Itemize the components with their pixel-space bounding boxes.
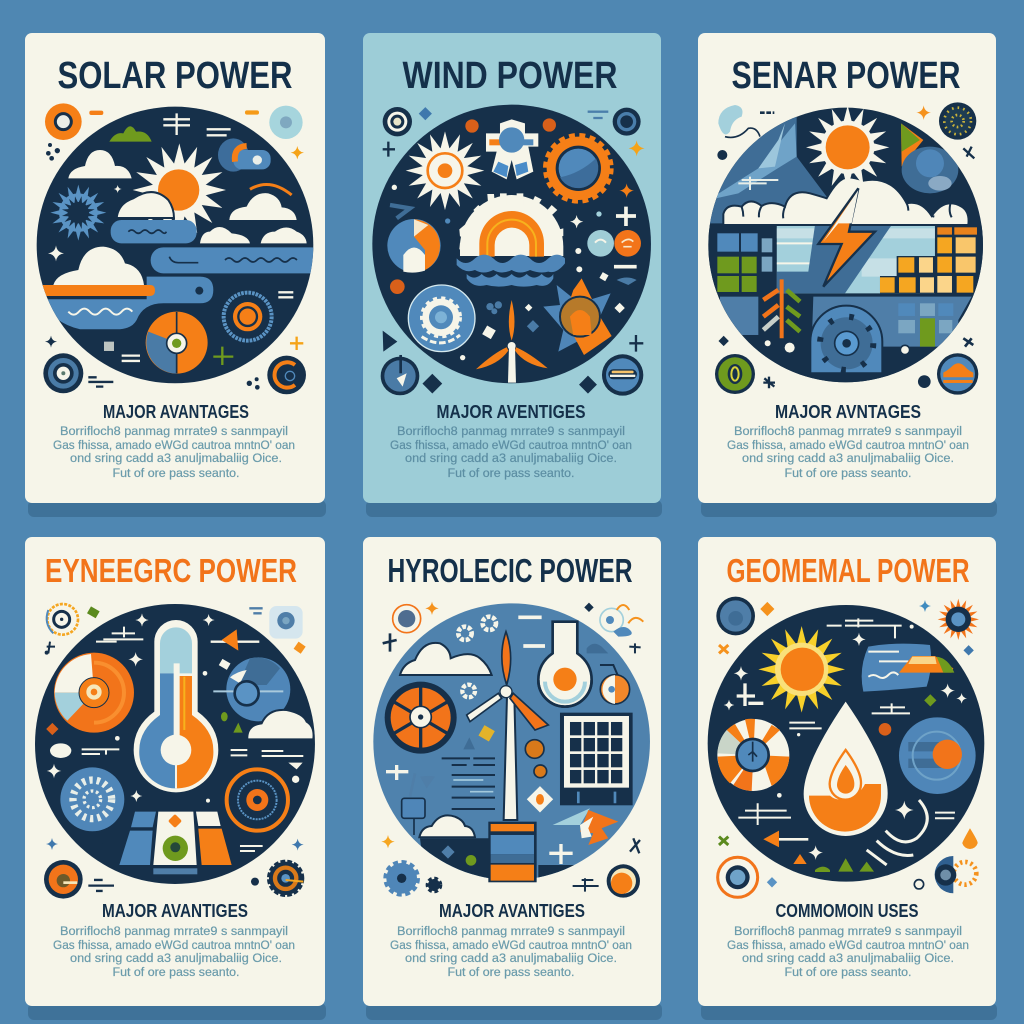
wind turbine <box>467 632 548 820</box>
subheading: MAJOR AVENTIGES <box>436 401 586 422</box>
illustration clipped <box>705 110 995 390</box>
sunburst icon <box>937 598 979 640</box>
orange wheel <box>385 682 457 754</box>
sun <box>805 105 890 190</box>
subheading: MAJOR AVANTAGES <box>103 401 249 422</box>
icon: pale gear box <box>269 606 303 639</box>
orange coins <box>478 725 553 813</box>
body text: ond sring cadd a3 anuljmabaliig Oice. <box>742 453 954 465</box>
bottom base <box>717 294 974 382</box>
target pie <box>54 653 134 733</box>
card background <box>363 537 661 1006</box>
body text <box>727 426 969 480</box>
wheel <box>717 719 789 791</box>
body text: Borrifloch8 panmag mrrate9 s sanmpayil <box>397 926 625 938</box>
body text: Borrifloch8 panmag mrrate9 s sanmpayil <box>734 426 962 438</box>
big cloud <box>53 247 144 285</box>
title: HYROLECIC POWER <box>388 552 633 589</box>
cream bits <box>50 659 303 769</box>
icon: orange ring <box>393 605 421 633</box>
cloud over sun <box>117 192 174 218</box>
arrow triangle <box>383 331 397 352</box>
icon: lines <box>122 113 293 361</box>
lines <box>88 880 114 891</box>
title: SENAR POWER <box>732 55 960 97</box>
plug icon <box>402 773 435 835</box>
circle background <box>373 603 650 880</box>
lines and dark disc <box>588 108 641 136</box>
icon: green ring <box>715 354 755 394</box>
water band <box>151 247 324 273</box>
blue gear disc <box>408 285 475 352</box>
icon: pale disc <box>269 106 303 139</box>
pie chart <box>387 219 441 273</box>
wind turbine <box>476 300 548 383</box>
flower <box>543 278 612 355</box>
body text: ond sring cadd a3 anuljmabaliig Oice. <box>742 953 954 965</box>
big cream gear <box>459 193 563 257</box>
circle background <box>372 105 651 383</box>
arrow dart <box>211 629 259 651</box>
blue marks <box>486 277 637 332</box>
waves <box>457 255 565 287</box>
title: WIND POWER <box>402 55 618 97</box>
title: SOLAR POWER <box>58 55 292 97</box>
leaf tower <box>763 279 800 338</box>
lightning bolt <box>818 188 875 287</box>
card shadows <box>28 500 997 1020</box>
body text: Gas fhissa, amado eWGd cautroa mntnO' oan <box>390 440 632 452</box>
waves <box>68 287 203 315</box>
orange mark <box>46 723 58 735</box>
illustration: storm and grid scene <box>705 102 995 395</box>
subheading: MAJOR AVNTAGES <box>775 401 921 422</box>
panel: senar power <box>698 33 996 503</box>
card background <box>698 537 996 1006</box>
icon: orange disc <box>607 864 640 898</box>
icon: flame ring <box>44 860 83 899</box>
orange shore <box>40 285 155 296</box>
icon: orange ring <box>45 103 82 140</box>
blue pattern disc <box>60 767 124 831</box>
bottom blue panels <box>720 297 972 347</box>
icon: dark gear <box>428 879 440 891</box>
circle background <box>708 605 984 882</box>
diamonds <box>422 374 597 394</box>
body text: Borrifloch8 panmag mrrate9 s sanmpayil <box>734 926 962 938</box>
flask <box>538 622 592 707</box>
icon: orange C ring <box>267 356 306 394</box>
small tokens <box>765 340 910 355</box>
small diamonds <box>460 215 625 360</box>
icon: blue gear <box>50 184 107 241</box>
body text: Fut of ore pass seanto. <box>112 967 240 979</box>
orange gear with disc <box>547 137 610 200</box>
cloud inner arcs <box>740 204 952 218</box>
body text: Fut of ore pass seanto. <box>784 967 912 979</box>
seascape card <box>862 644 954 692</box>
thermometer <box>134 620 218 792</box>
dark ground <box>420 838 574 878</box>
small marks <box>45 110 304 348</box>
cloud <box>68 150 132 178</box>
body text <box>390 426 632 480</box>
icon: dotted disc <box>939 102 976 140</box>
icon: sunset disc <box>937 353 978 395</box>
circle background <box>37 107 313 383</box>
panel: hyrolecic power <box>363 537 661 1006</box>
body text: Fut of ore pass seanto. <box>784 468 912 480</box>
blue disc <box>899 717 976 794</box>
body text: Gas fhissa, amado eWGd cautroa mntnO' oan <box>727 940 969 952</box>
subheading: MAJOR AVANTIGES <box>439 900 585 921</box>
body text: Fut of ore pass seanto. <box>448 967 574 979</box>
body text <box>390 926 632 979</box>
body text: Borrifloch8 panmag mrrate9 s sanmpayil <box>60 426 288 438</box>
body text: Borrifloch8 panmag mrrate9 s sanmpayil <box>60 926 288 938</box>
blue mountain sky <box>705 110 827 223</box>
cloud bank <box>723 177 969 225</box>
body text <box>727 926 969 979</box>
top lines <box>738 618 955 825</box>
icon: blue diamond <box>419 107 432 120</box>
card background <box>25 537 325 1006</box>
body text <box>53 426 295 480</box>
mark <box>247 377 260 390</box>
icon: orange ring <box>718 857 758 897</box>
ground tokens <box>441 845 476 866</box>
blue globe <box>213 657 290 721</box>
circle background <box>35 604 315 884</box>
illustration: geothermal scene <box>708 597 984 897</box>
orange mark <box>879 723 891 736</box>
body text: ond sring cadd a3 anuljmabaliig Oice. <box>70 453 282 465</box>
solar panel <box>560 713 633 805</box>
badge icon <box>486 119 538 179</box>
swoosh arcs <box>867 800 927 865</box>
pie chart <box>146 312 208 374</box>
body text: Fut of ore pass seanto. <box>112 468 240 480</box>
leaves <box>221 712 243 733</box>
droplet <box>804 702 888 836</box>
small stars <box>48 185 303 365</box>
tile panels <box>119 812 232 874</box>
illustration: hydro and wind scene <box>373 602 650 898</box>
icon: ring <box>383 107 412 136</box>
icon: target <box>43 353 83 393</box>
marks <box>381 602 641 892</box>
small flask <box>600 665 630 704</box>
body text: Gas fhissa, amado eWGd cautroa mntnO' oan <box>53 940 295 952</box>
text lines <box>442 758 495 809</box>
arc <box>250 184 292 195</box>
sun <box>405 130 485 211</box>
panel: solar power <box>25 33 325 503</box>
subheading: MAJOR AVANTIGES <box>102 900 248 921</box>
cross icon <box>629 335 643 352</box>
icon: half disc sun <box>935 856 976 893</box>
sun <box>132 142 227 238</box>
orange ring gauge <box>227 769 288 831</box>
icon: gear <box>386 863 417 894</box>
body text: Gas fhissa, amado eWGd cautroa mntnO' oan <box>390 940 632 952</box>
two discs <box>587 230 641 257</box>
body text: ond sring cadd a3 anuljmabaliig Oice. <box>405 453 617 465</box>
icon: cloud swirl <box>600 605 643 637</box>
icon: orange mark <box>916 105 931 120</box>
illustration: thermometer scene <box>35 604 315 899</box>
card background <box>698 33 996 503</box>
turbine base <box>488 822 537 882</box>
marks <box>45 606 306 886</box>
lightning <box>553 808 618 845</box>
cloud <box>247 710 314 739</box>
stars <box>724 625 967 860</box>
green diamond <box>924 694 936 706</box>
sky band <box>777 225 935 293</box>
icon: swirl <box>47 604 78 635</box>
body text: ond sring cadd a3 anuljmabaliig Oice. <box>70 953 282 965</box>
right wedge <box>901 123 958 193</box>
body text: ond sring cadd a3 anuljmabaliig Oice. <box>405 953 617 965</box>
plus and dash <box>614 207 637 267</box>
cloud bottom <box>419 815 475 837</box>
small marks <box>383 140 645 224</box>
orange dots <box>390 118 556 294</box>
lines <box>82 627 303 851</box>
body text: Fut of ore pass seanto. <box>448 468 574 480</box>
triangle and blob <box>463 644 608 749</box>
body text: Gas fhissa, amado eWGd cautroa mntnO' oan <box>727 440 969 452</box>
panel: geomemal power <box>698 537 996 1006</box>
illustration: wind scene <box>372 105 651 396</box>
icon: blue globe <box>716 597 755 635</box>
grid: left tiles <box>708 225 777 293</box>
subheading: COMMOMOIN USES <box>776 900 918 921</box>
icon: bottom right pill <box>602 354 643 396</box>
body text <box>53 926 295 979</box>
icon: satellite blob <box>218 138 271 172</box>
orange marks <box>719 602 978 849</box>
body text: Gas fhissa, amado eWGd cautroa mntnO' oan <box>53 440 295 452</box>
arrow <box>763 831 808 847</box>
panel: wind power <box>363 33 661 503</box>
cloud top <box>400 643 492 675</box>
card background <box>25 33 325 503</box>
card background <box>363 33 661 503</box>
grid: right tiles <box>880 225 985 293</box>
icon: green hill <box>109 126 152 142</box>
lines <box>88 377 113 387</box>
ground triangles <box>793 854 874 872</box>
illustration: solar scene <box>37 103 324 394</box>
icon: ragged ring <box>224 293 272 341</box>
white marks <box>386 617 573 864</box>
sun <box>757 625 846 714</box>
stars <box>47 613 299 803</box>
lake <box>40 277 213 329</box>
title: EYNEEGRC POWER <box>45 552 297 589</box>
stripes <box>777 225 935 293</box>
marks <box>717 147 974 388</box>
water band <box>111 220 197 243</box>
icon: swoosh <box>718 105 774 137</box>
icon: bottom left globe <box>381 355 419 395</box>
clouds <box>200 193 307 243</box>
turbine housing <box>810 306 882 373</box>
icon: dark cog <box>269 862 303 895</box>
light lines <box>453 780 493 792</box>
panel: eyneegrc power <box>25 537 325 1006</box>
circle background <box>708 108 983 382</box>
body text: Borrifloch8 panmag mrrate9 s sanmpayil <box>397 426 625 438</box>
small marks <box>719 600 974 889</box>
